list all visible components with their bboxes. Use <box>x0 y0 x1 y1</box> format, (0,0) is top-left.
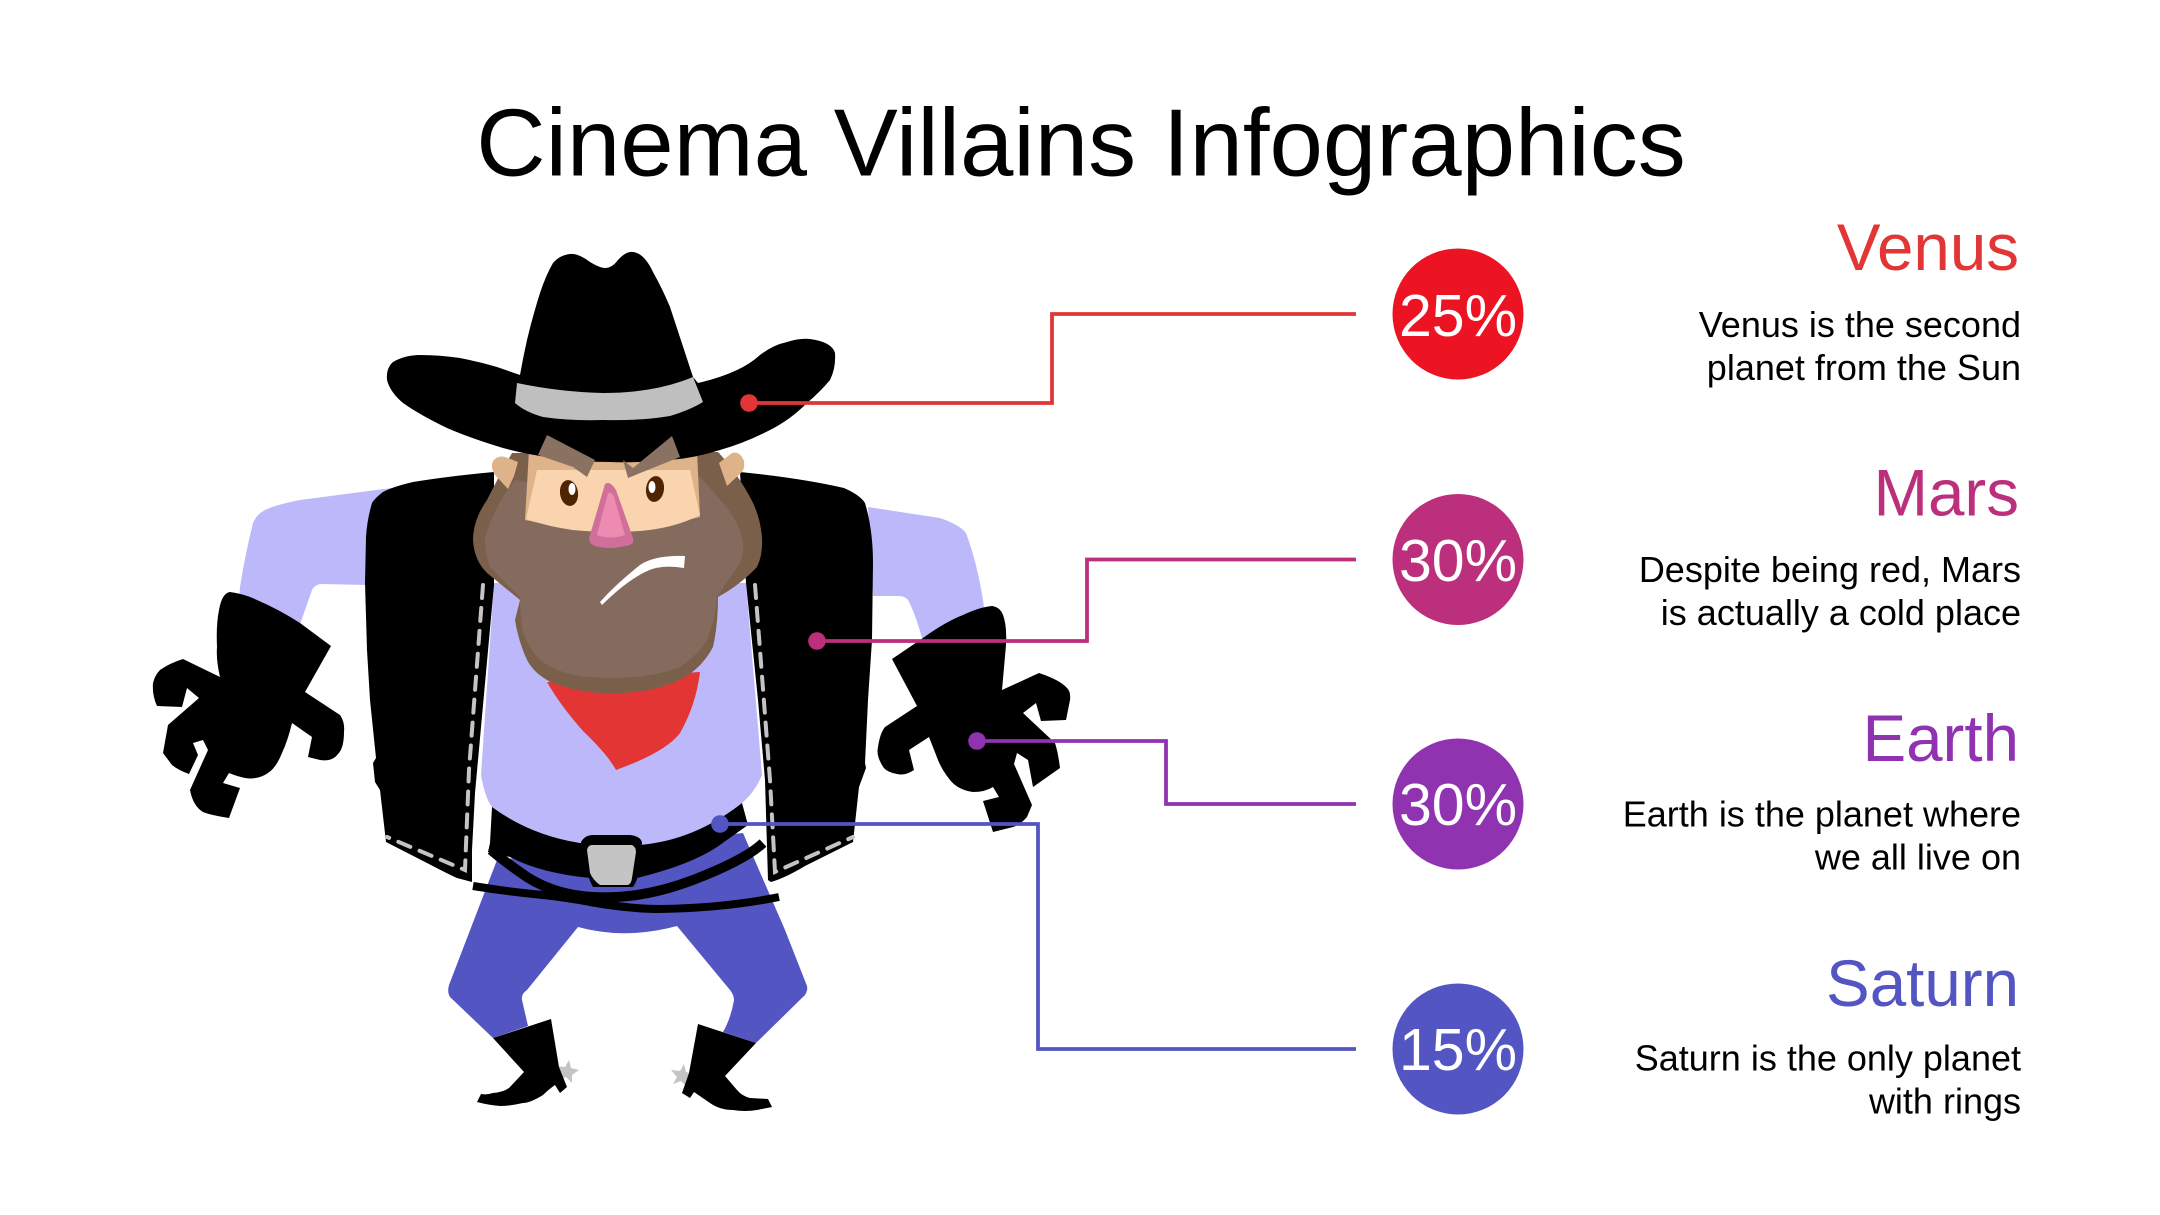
gun belt straps <box>473 843 779 909</box>
connector: Saturn <box>711 815 1356 1049</box>
right sleeve <box>868 507 990 650</box>
text block: Venus: planet from the Sun <box>1707 347 2021 388</box>
connector: Venus <box>740 314 1356 412</box>
text block: Mars: is actually a cold place <box>1661 592 2021 633</box>
right ear <box>719 453 744 486</box>
badge: 30% Earth: 30% <box>1399 772 1517 838</box>
badge: 15% <box>1392 984 1524 1114</box>
shirt <box>481 583 762 845</box>
connector: Mars <box>808 560 1356 650</box>
text block: Saturn: Saturn is the only planet <box>1635 1038 2021 1078</box>
badge: 30% Mars: 30% <box>1399 528 1517 594</box>
face <box>526 470 700 532</box>
legs <box>448 833 807 1043</box>
text block: Saturn <box>1635 947 2021 1122</box>
left ear <box>492 456 518 489</box>
vest right <box>740 472 873 882</box>
forehead shadow <box>525 450 700 531</box>
left eye <box>558 479 580 507</box>
text block: Saturn: Saturn <box>1826 947 2019 1020</box>
belt <box>488 803 748 878</box>
badge: 15%: 15% <box>1399 1017 1517 1083</box>
text block: Venus: Venus is the second <box>1699 304 2021 345</box>
belt buckle <box>581 835 642 887</box>
text block: Earth: Earth is the planet where <box>1623 794 2021 834</box>
hat <box>387 252 835 462</box>
beard <box>473 452 762 693</box>
bandana <box>547 672 700 770</box>
right boot <box>682 1024 772 1111</box>
badge: 30% Earth <box>1392 738 1524 870</box>
left boot <box>477 1019 567 1106</box>
vest stitching <box>387 585 853 872</box>
illustration: cowboy villain <box>153 252 1070 1111</box>
left eyebrow <box>538 435 595 477</box>
text block: Earth: we all live on <box>1814 836 2021 878</box>
badge: 25%: 25% <box>1399 283 1517 349</box>
text block: Earth: Earth <box>1862 702 2019 775</box>
text block: Venus: Venus <box>1837 211 2019 284</box>
text block: Mars: Mars <box>1873 456 2019 530</box>
badge: 25% <box>1392 248 1524 380</box>
left sleeve <box>236 488 392 640</box>
spurs <box>556 1060 694 1087</box>
hat band <box>515 377 703 420</box>
mustache highlight <box>600 556 685 605</box>
text block: Earth <box>1623 702 2021 878</box>
vest left <box>365 472 494 882</box>
text block: Mars: Despite being red, Mars <box>1639 549 2021 590</box>
badge: 30% Mars <box>1392 494 1524 625</box>
left glove <box>153 592 344 818</box>
beard highlight <box>485 475 743 678</box>
right eyebrow <box>623 436 680 478</box>
title: Cinema Villains Infographics <box>476 90 1686 196</box>
nose <box>589 483 633 548</box>
right eye <box>644 475 666 503</box>
right glove <box>878 606 1070 832</box>
text block: Mars <box>1639 456 2021 633</box>
text block: Venus <box>1699 211 2021 388</box>
connector: Earth <box>968 732 1356 804</box>
text block: Saturn: with rings <box>1868 1080 2021 1122</box>
